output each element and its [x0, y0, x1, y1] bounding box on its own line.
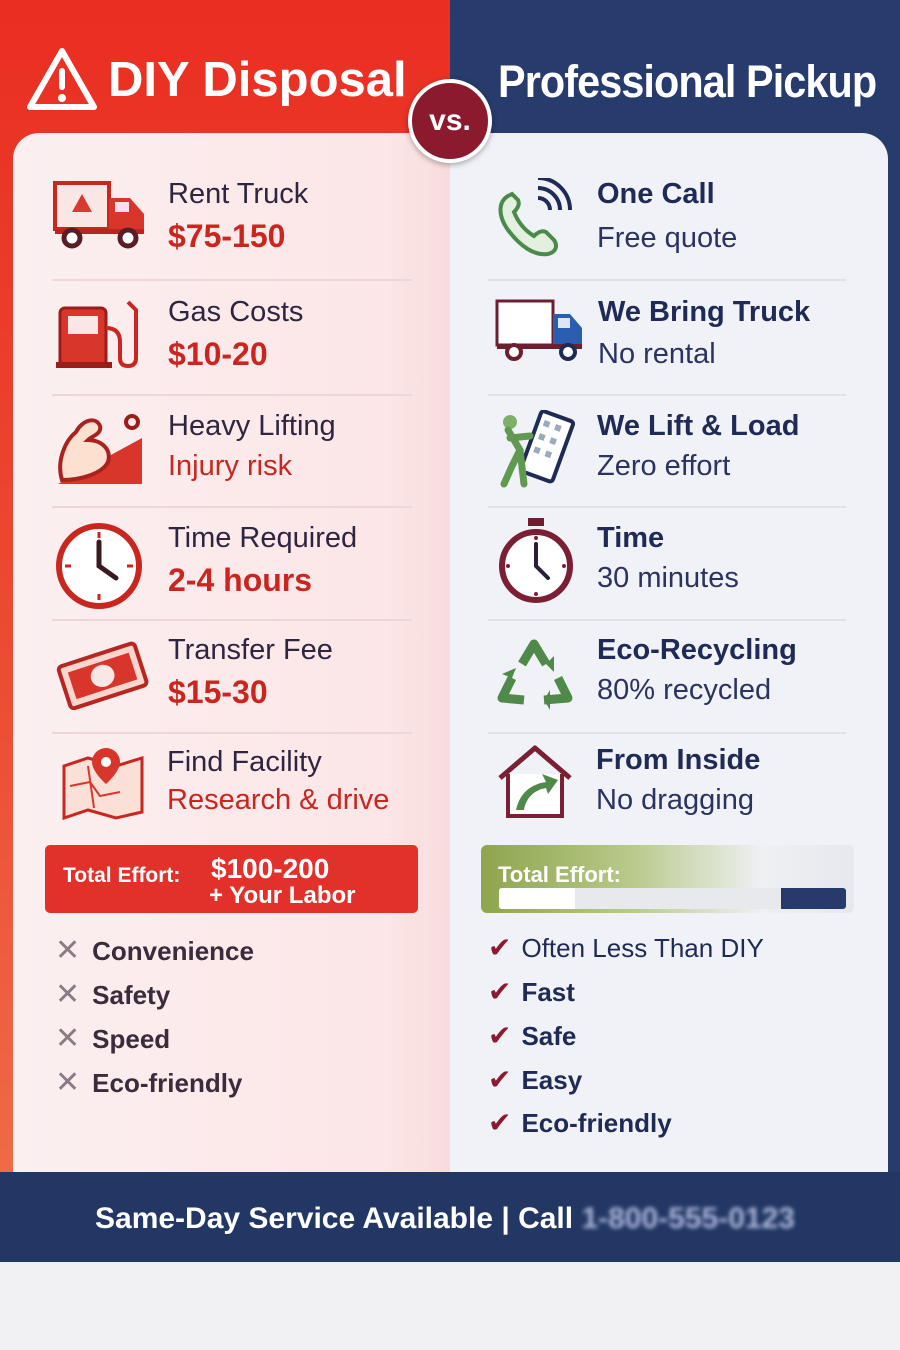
footer — [0, 1172, 900, 1262]
vs badge — [408, 79, 492, 163]
row: One Call: Free quote — [597, 222, 737, 254]
panel: Pro card — [450, 133, 888, 1172]
row: We Bring Truck: We Bring Truck — [598, 296, 810, 328]
row: Heavy Lifting — [58, 410, 336, 484]
icon: phone — [498, 178, 572, 256]
callout: DIY total effort: Total Effort: — [63, 864, 180, 887]
row: Eco-Recycling — [498, 634, 797, 710]
row: Rent Truck: $75-150 — [168, 218, 285, 254]
title: DIY Disposal — [27, 48, 407, 110]
row: From Inside: From Inside — [596, 744, 760, 776]
background right navy — [450, 0, 900, 1172]
background left red — [0, 0, 450, 1172]
panel: DIY card — [13, 133, 450, 1172]
row: Eco-Recycling: 80% recycled — [597, 674, 771, 706]
row: Time — [499, 518, 739, 603]
callout: DIY total effort — [45, 845, 418, 913]
row: Gas Costs: $10-20 — [168, 336, 268, 372]
Pro pros list: ✔ Eco-friendly — [488, 1107, 672, 1138]
row: From Inside — [498, 744, 760, 818]
row: Gas Costs — [56, 296, 303, 372]
row: Find Facility: Find Facility — [167, 746, 322, 778]
title: Professional Pickup: Professional Pickup — [498, 56, 876, 107]
DIY cons list: ✕ Eco-friendly — [55, 1066, 242, 1099]
vs badge: vs. — [429, 104, 471, 137]
footer: Same-Day Service Available | Call 1-800-555-0123 — [95, 1202, 795, 1235]
callout: Pro total effort: Total Effort: — [498, 862, 621, 887]
DIY cons list: ✕ Speed — [55, 1022, 170, 1055]
icon: recycle — [498, 640, 572, 710]
icon: house with arrow — [498, 745, 572, 818]
row: Time Required — [56, 522, 357, 609]
row: Transfer Fee: Transfer Fee — [168, 634, 333, 666]
icon: gas pump — [56, 300, 138, 368]
callout: DIY total effort: + Your Labor — [209, 882, 355, 909]
icon: clock — [56, 523, 142, 609]
row: Eco-Recycling: Eco-Recycling — [597, 634, 797, 666]
icon: truck — [53, 181, 144, 248]
DIY cons list — [55, 934, 254, 1099]
row: We Lift & Load: We Lift & Load — [597, 410, 799, 442]
DIY cons list: ✕ Convenience — [55, 934, 254, 967]
row: Rent Truck: Rent Truck — [168, 178, 308, 210]
row: Time Required: Time Required — [168, 522, 357, 554]
Pro pros list — [488, 932, 764, 1138]
icon: blue truck — [496, 300, 582, 361]
row: Find Facility — [62, 746, 389, 820]
row: Transfer Fee — [56, 634, 333, 710]
row: One Call — [498, 178, 737, 256]
row: Time Required: 2-4 hours — [168, 562, 312, 598]
icon: mover with item — [500, 410, 575, 488]
row: Time: Time — [597, 522, 664, 554]
Pro pros list: ✔ Fast — [488, 976, 575, 1007]
row: One Call: One Call — [597, 178, 715, 210]
row: We Bring Truck — [496, 296, 810, 370]
title: DIY Disposal: DIY Disposal — [108, 53, 407, 107]
row: From Inside: No dragging — [596, 784, 754, 816]
DIY cons list: ✕ Safety — [55, 978, 170, 1011]
row: Heavy Lifting: Injury risk — [168, 450, 292, 482]
effort bar — [499, 888, 846, 909]
row: Gas Costs: Gas Costs — [168, 296, 303, 328]
row: Rent Truck — [53, 178, 308, 254]
row: Find Facility: Research & drive — [167, 784, 389, 816]
icon: map pin — [62, 748, 144, 820]
icon: muscle arm — [58, 414, 142, 484]
icon: money — [56, 642, 148, 710]
row: Heavy Lifting: Heavy Lifting — [168, 410, 336, 442]
row: We Lift & Load — [500, 410, 799, 488]
row: We Bring Truck: No rental — [598, 338, 716, 370]
icon: stopwatch — [499, 518, 573, 603]
row: We Lift & Load: Zero effort — [597, 450, 730, 482]
callout: Pro total effort — [481, 845, 854, 913]
Pro pros list: ✔ Easy — [488, 1064, 582, 1095]
row: Transfer Fee: $15-30 — [168, 674, 268, 710]
Pro pros list: ✔ Safe — [488, 1020, 576, 1051]
Pro pros list: ✔ Often Less Than DIY — [488, 932, 764, 963]
callout: DIY total effort: $100-200 — [211, 853, 329, 884]
row: Time: 30 minutes — [597, 562, 739, 594]
